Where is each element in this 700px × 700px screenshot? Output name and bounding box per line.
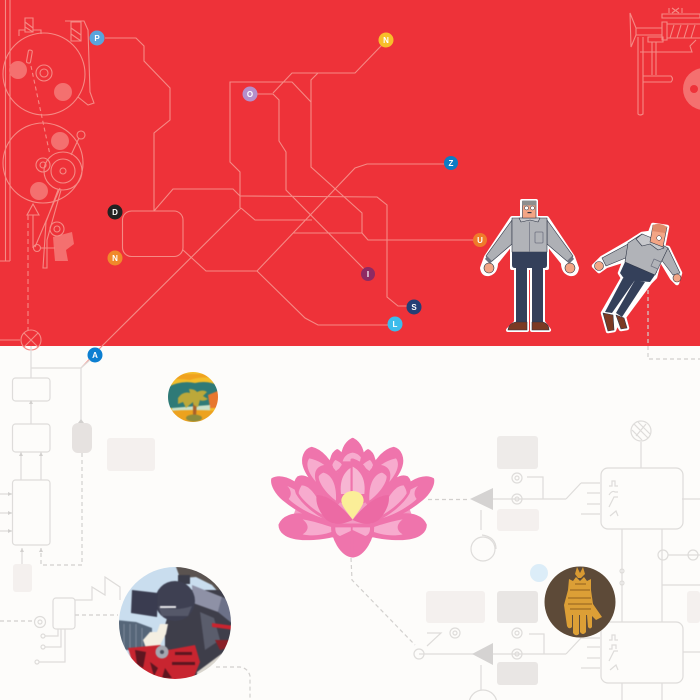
dashed connector from lotus <box>351 558 415 645</box>
badge: A <box>88 348 102 362</box>
badge: S <box>406 300 422 314</box>
badge: O: O <box>247 90 253 99</box>
badge: U <box>473 233 487 247</box>
schematic: right processing blocks <box>601 421 700 700</box>
badge: S: S <box>411 303 417 312</box>
badge: D: D <box>112 208 118 217</box>
badge: I <box>361 267 375 281</box>
schematic: lower right amplifier <box>414 591 700 700</box>
image: steam locomotive <box>116 564 234 682</box>
decorative pale blue dot <box>530 564 548 582</box>
badge: P: P <box>94 34 100 43</box>
dashed connector from falling man <box>648 290 700 359</box>
badge: N yellow <box>378 32 394 48</box>
badge: N orange: N <box>112 254 118 263</box>
panel: red upper background <box>0 0 700 346</box>
badge: O <box>242 86 258 102</box>
badge: Z <box>444 156 458 170</box>
figure: falling man <box>594 224 681 331</box>
badge: L <box>388 316 402 332</box>
badge: N orange <box>108 250 122 266</box>
schematic: lower left controller <box>0 577 120 664</box>
figure: standing man <box>482 201 577 330</box>
dashed connector from locomotive <box>216 667 250 700</box>
badge: A: A <box>92 351 98 360</box>
badge: Z: Z <box>449 159 454 168</box>
machine schematic: top right <box>630 8 700 115</box>
metro line network <box>81 38 474 368</box>
image: palm landscape <box>168 372 218 422</box>
badge: L: L <box>393 320 398 329</box>
badge: D <box>108 204 122 220</box>
badge: N yellow: N <box>383 36 389 45</box>
badge: I: I <box>367 270 369 279</box>
schematic: lower left blocks <box>0 346 155 592</box>
image: golden hand pendant <box>544 566 616 638</box>
machine schematic: top left <box>0 0 94 350</box>
badge: P <box>90 30 104 46</box>
badge: U: U <box>477 236 483 245</box>
image: lotus flower <box>273 439 433 556</box>
schematic: upper right amplifier <box>428 436 600 561</box>
